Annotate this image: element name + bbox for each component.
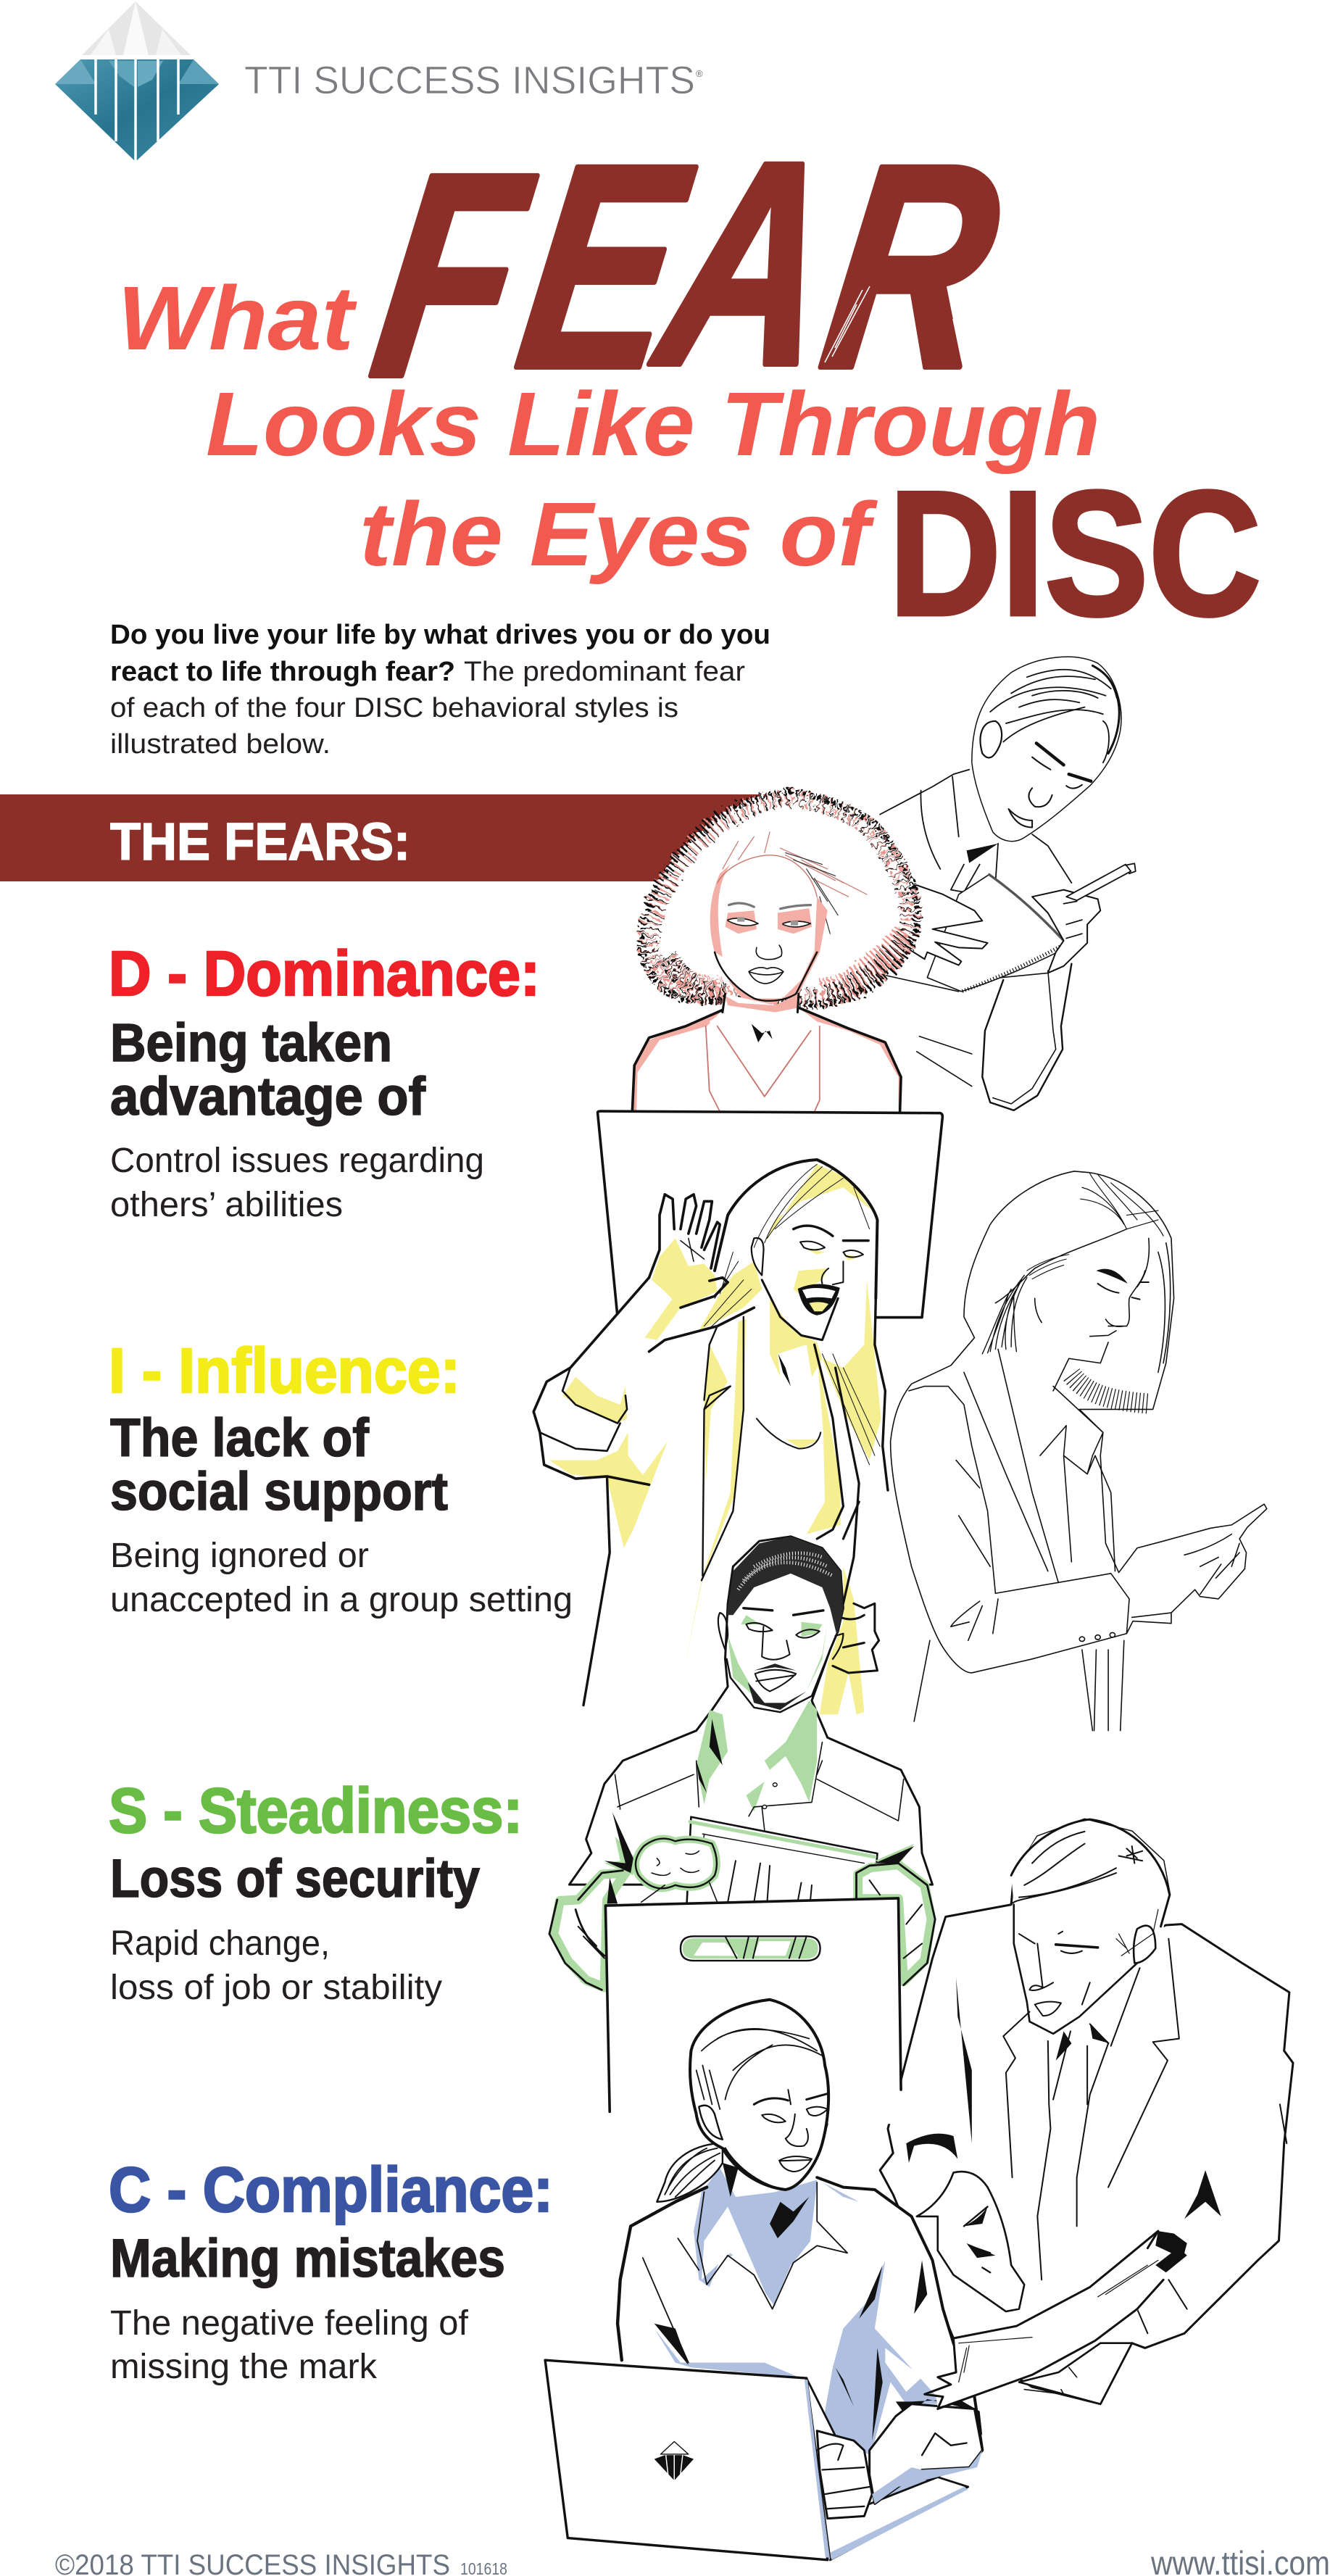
description: Control issues regarding (110, 1142, 484, 1180)
heading: C - Compliance: (109, 2155, 553, 2225)
intro text: of each of the four DISC behavioral styles is (110, 693, 678, 723)
section: S - Steadiness (109, 1776, 523, 2007)
intro text: illustrated below. (110, 729, 331, 760)
section: D - Dominance: others’ abilities (110, 1186, 343, 1224)
intro text: Do you live your life by what drives you or do you (110, 620, 770, 650)
heading: S - Steadiness: (109, 1776, 523, 1846)
title: FEAR brush lettering: FEAR (357, 101, 1018, 437)
title: What: What (117, 268, 357, 369)
banner: the fears (0, 794, 797, 881)
upper body and head (569, 1537, 933, 1885)
hand (917, 2172, 1024, 2311)
yellow shading (549, 1164, 881, 1714)
outlines (715, 1160, 877, 1298)
neck (710, 994, 817, 1095)
heading: D - Dominance: (109, 939, 540, 1009)
laptop (545, 2360, 828, 2560)
section: I - Influence (109, 1336, 573, 1619)
head (690, 2000, 828, 2190)
illustration: man in suit (C) (880, 1819, 1293, 2404)
section: S - Steadiness: loss of job or stability (110, 1969, 442, 2007)
description: Being ignored or (110, 1537, 369, 1575)
brush streaks (825, 286, 969, 362)
description: The negative feeling of (110, 2304, 469, 2343)
hair (641, 789, 919, 1006)
face (765, 1226, 870, 1340)
section: C - Compliance: missing the mark (110, 2348, 378, 2386)
illustration: woman at laptop (C) (545, 2000, 982, 2560)
illustration: man writing on notepad (880, 657, 1136, 1110)
banner: the fears: THE FEARS: (110, 813, 410, 871)
illustration: D laptop screen (598, 1111, 942, 1318)
body (632, 1007, 901, 1112)
title: the Eyes of: the Eyes of (359, 484, 878, 585)
hands, plant, papers, bag (549, 1812, 935, 2124)
face (711, 855, 818, 1001)
intro text: The predominant fear (464, 657, 745, 687)
section: I - Influence: unaccepted in a group setting (110, 1581, 573, 1619)
illustration: woman waving (I) (533, 1160, 888, 1714)
section: D - Dominance (109, 939, 540, 1224)
ponytail (657, 2143, 723, 2202)
section: I - Influence: social support (110, 1461, 448, 1521)
fear: Being taken (110, 1013, 392, 1073)
title: DISC: DISC (889, 454, 1261, 652)
intro text (110, 620, 770, 760)
title (117, 101, 1261, 652)
fear: Loss of security (110, 1848, 480, 1908)
logo wordmark: TTI SUCCESS INSIGHTS (244, 59, 695, 102)
title: Looks Like Through: Looks Like Through (206, 374, 1100, 475)
section: D - Dominance: advantage of (110, 1066, 425, 1126)
heading: I - Influence: (109, 1336, 460, 1406)
fear: Making mistakes (110, 2228, 505, 2288)
laptop base (807, 2378, 968, 2560)
logo: TTI diamond (55, 1, 219, 162)
intro text: react to life through fear? (110, 657, 455, 687)
section: C - Compliance (109, 2155, 553, 2386)
fist (817, 2431, 872, 2519)
registered mark: ® (696, 68, 703, 79)
fear: The lack of (110, 1408, 369, 1468)
illustration: man's pointing arm with paper (925, 2231, 1187, 2409)
torso (618, 2177, 982, 2519)
illustration: man with bag (S) (549, 1537, 935, 2124)
illustration: woman with phone (891, 1171, 1267, 1731)
laptop logo (654, 2441, 694, 2480)
illustration: woman with afro (D) (632, 789, 919, 1112)
description: Rapid change, (110, 1924, 330, 1963)
